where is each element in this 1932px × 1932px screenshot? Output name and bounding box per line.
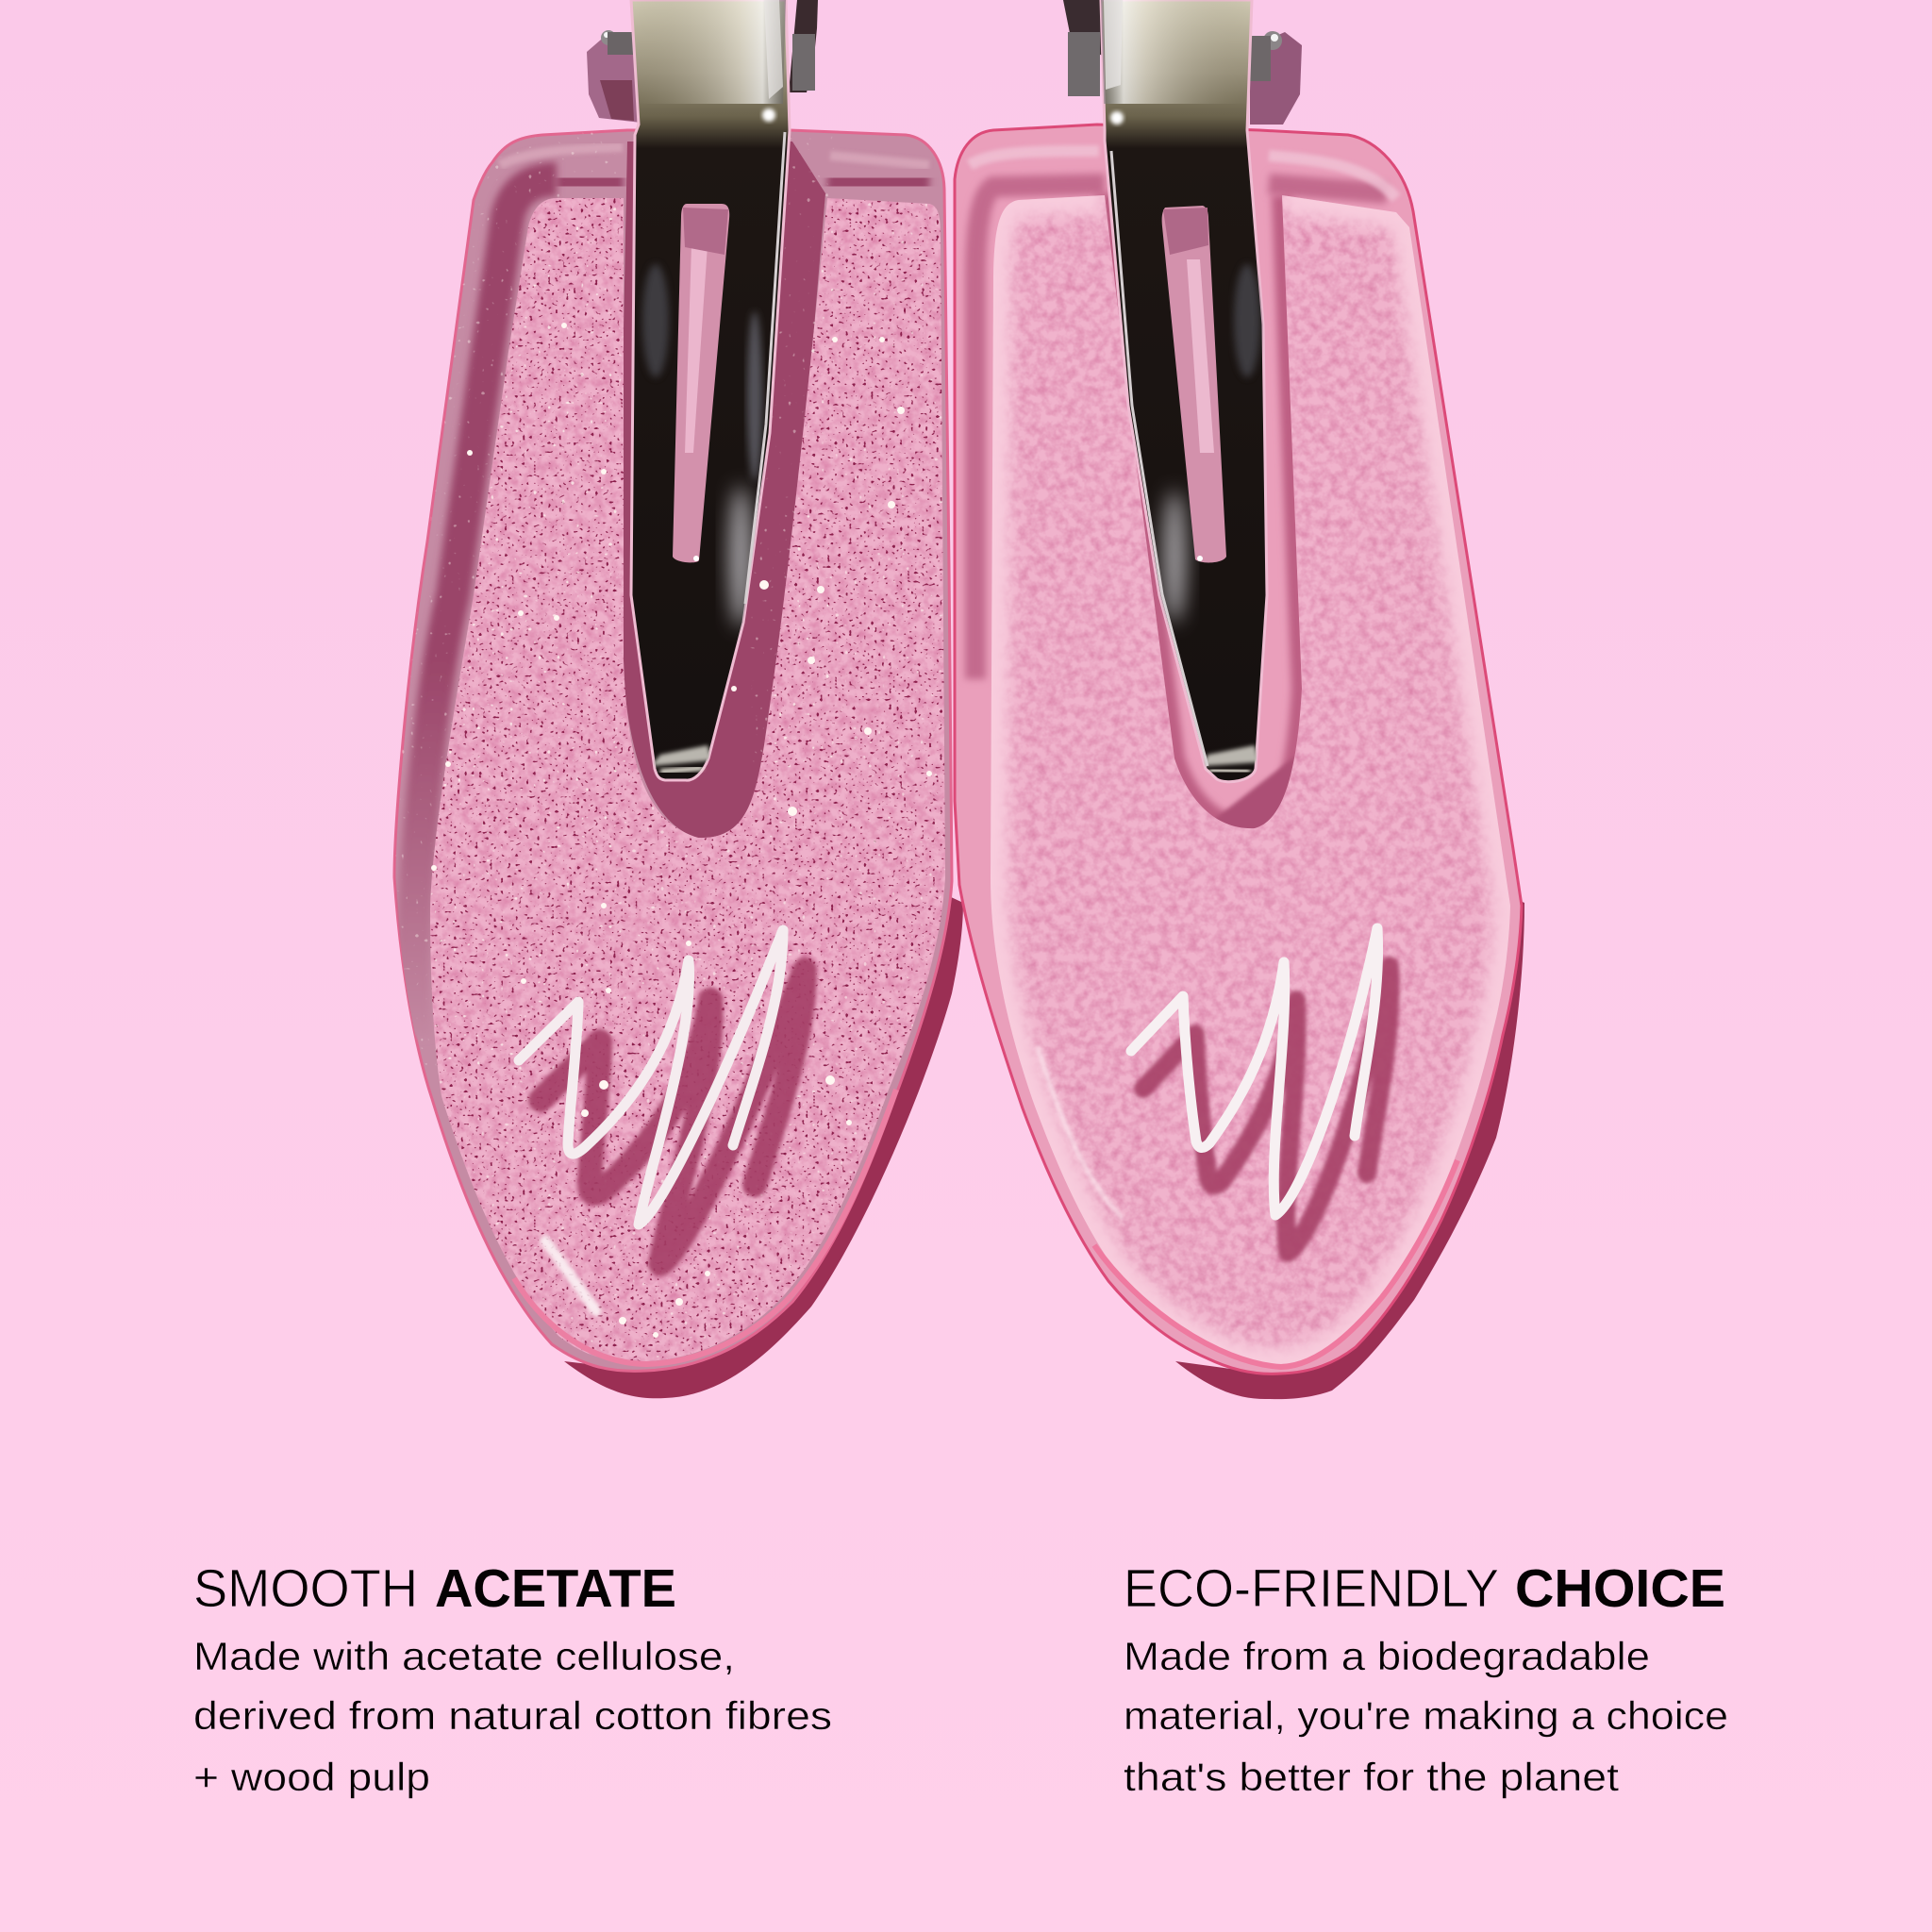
left clip light inner field: [415, 189, 962, 1377]
body: smooth acetate: Made with acetate cellulose,: [193, 1634, 735, 1678]
heading: eco-friendly choice: ECO-FRIENDLY: [1124, 1558, 1499, 1619]
text block: eco-friendly choice: [1124, 1558, 1728, 1799]
heading: eco-friendly choice: CHOICE: [1515, 1558, 1725, 1619]
heading: smooth acetate: ACETATE: [435, 1558, 676, 1619]
body: smooth acetate: [193, 1634, 832, 1799]
left metal clip: [631, 0, 790, 780]
left clip dark inner band: [413, 142, 929, 1038]
hinge of left clip: [587, 0, 818, 123]
body: eco-friendly choice: material, you're making a choice: [1124, 1693, 1728, 1738]
right clip slot: [1162, 206, 1226, 562]
body: smooth acetate: derived from natural cotton fibres: [193, 1693, 832, 1738]
shadow of left clip: [564, 896, 963, 1398]
hinge of right clip: [1063, 0, 1302, 125]
body: eco-friendly choice: that's better for the planet: [1124, 1755, 1619, 1799]
heading: smooth acetate: SMOOTH: [193, 1558, 418, 1619]
right clip white edge streak: [1038, 1047, 1123, 1219]
right metal clip: [1101, 0, 1267, 782]
left clip slot: [673, 204, 729, 562]
glitter dots: [431, 323, 932, 1338]
photo: left glitter clip: [391, 0, 963, 1398]
body: smooth acetate: + wood pulp: [193, 1755, 430, 1799]
right logo scribble: [1131, 928, 1391, 1253]
right clip dark inner band: [970, 151, 1396, 841]
right clip light inner field: [981, 189, 1528, 1377]
left clip highlight streak: [545, 1241, 596, 1311]
left clip body: [394, 130, 952, 1371]
heading: eco-friendly choice: [1124, 1558, 1725, 1619]
photo: right clear clip: [955, 0, 1528, 1399]
right clip lower rim: [1094, 1160, 1457, 1367]
text block: smooth acetate: [193, 1558, 832, 1799]
body: eco-friendly choice: Made from a biodegradable: [1124, 1634, 1650, 1678]
heading: smooth acetate: [193, 1558, 676, 1619]
right clip body: [955, 125, 1522, 1374]
left logo scribble: [519, 930, 805, 1264]
left clip lower edge rim: [514, 1090, 896, 1364]
sparkle over band: [391, 132, 835, 1075]
body: eco-friendly choice: [1124, 1634, 1728, 1799]
shadow of right clip: [1175, 896, 1524, 1399]
